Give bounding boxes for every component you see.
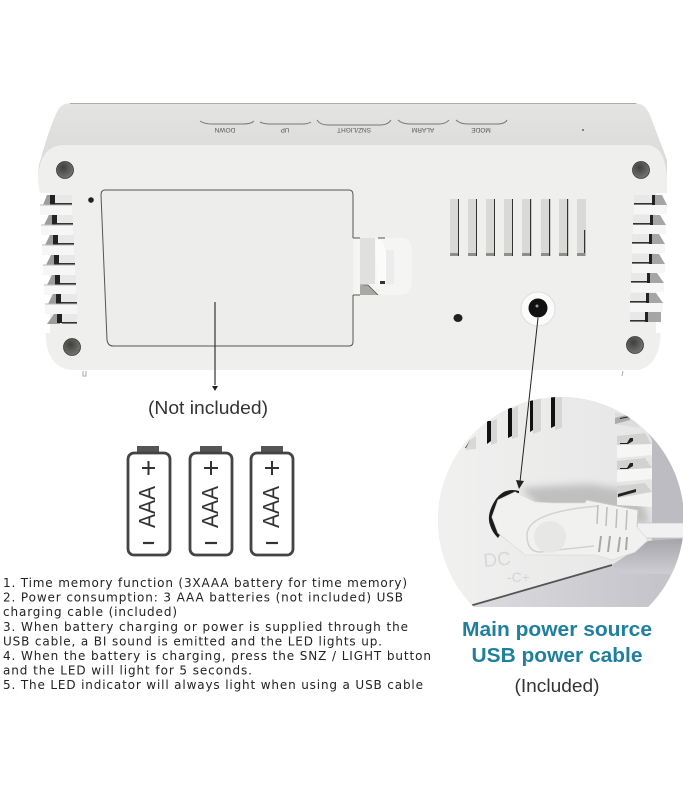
power socket recess	[489, 490, 519, 538]
feature notes: USB cable, a BI sound is emitted and the LED lights up.	[3, 634, 382, 648]
battery 1	[128, 446, 170, 555]
feature notes: and the LED will light for 5 seconds.	[3, 664, 252, 678]
heading: main power source	[462, 619, 652, 667]
battery 3: AAA	[258, 485, 284, 528]
inset: USB plug close-up	[430, 390, 683, 610]
top face with buttons	[38, 103, 667, 175]
label: not included: (Not included)	[148, 398, 268, 418]
top face with buttons: SNZ/LIGHT	[337, 126, 371, 133]
battery 3	[251, 446, 293, 555]
feature notes: 4. When the battery is charging, press the SNZ / LIGHT button	[3, 649, 431, 663]
ventilation slots	[450, 199, 586, 256]
power jack	[521, 292, 555, 326]
reset hole	[454, 314, 462, 322]
feature notes: 5. The LED indicator will always light when using a USB cable	[3, 678, 423, 692]
feet	[83, 371, 623, 376]
top face with buttons: ALARM	[412, 126, 434, 133]
top face with buttons: UP	[280, 126, 290, 133]
embossed polarity mark: -C+	[507, 569, 530, 585]
top face with buttons: DOWN	[214, 126, 235, 133]
inset fins	[615, 412, 652, 507]
feature notes: 3. When battery charging or power is supplied through the	[3, 620, 408, 634]
inset plug shadow	[520, 484, 650, 525]
label: included: (Included)	[514, 676, 600, 696]
clock rear housing	[36, 103, 670, 376]
embossed DC label: DC	[483, 549, 512, 572]
inset device edge	[466, 565, 612, 607]
arrow to battery label	[212, 302, 218, 391]
battery 1: AAA	[134, 485, 160, 528]
infographic canvas	[4, 103, 683, 696]
heading: main power source: Main power source	[462, 619, 652, 641]
arrow to power jack	[516, 318, 538, 489]
feature notes: 1. Time memory function (3XAAA battery for time memory)	[3, 576, 407, 590]
inset shaded table band	[612, 538, 683, 575]
indicator dot	[88, 197, 94, 203]
heading: main power source: USB power cable	[472, 645, 642, 667]
inset lower table	[648, 548, 681, 607]
inset vent slots	[465, 396, 562, 450]
USB cable	[636, 523, 683, 538]
feature notes: charging cable (included)	[3, 605, 177, 619]
battery door with clip	[101, 190, 412, 346]
battery 2	[190, 446, 232, 555]
front face	[38, 145, 667, 370]
right cooling fins	[630, 193, 670, 333]
inset device face	[430, 390, 652, 607]
feature notes: 2. Power consumption: 3 AAA batteries (not included) USB	[3, 590, 403, 604]
top face with buttons: MODE	[471, 126, 491, 133]
screw holes	[56, 162, 650, 356]
left cooling fins	[36, 193, 77, 333]
battery 2: AAA	[197, 485, 223, 528]
USB plug	[492, 492, 648, 560]
AAA batteries	[128, 446, 293, 555]
feature notes	[3, 576, 431, 692]
inset side wall	[650, 434, 683, 538]
